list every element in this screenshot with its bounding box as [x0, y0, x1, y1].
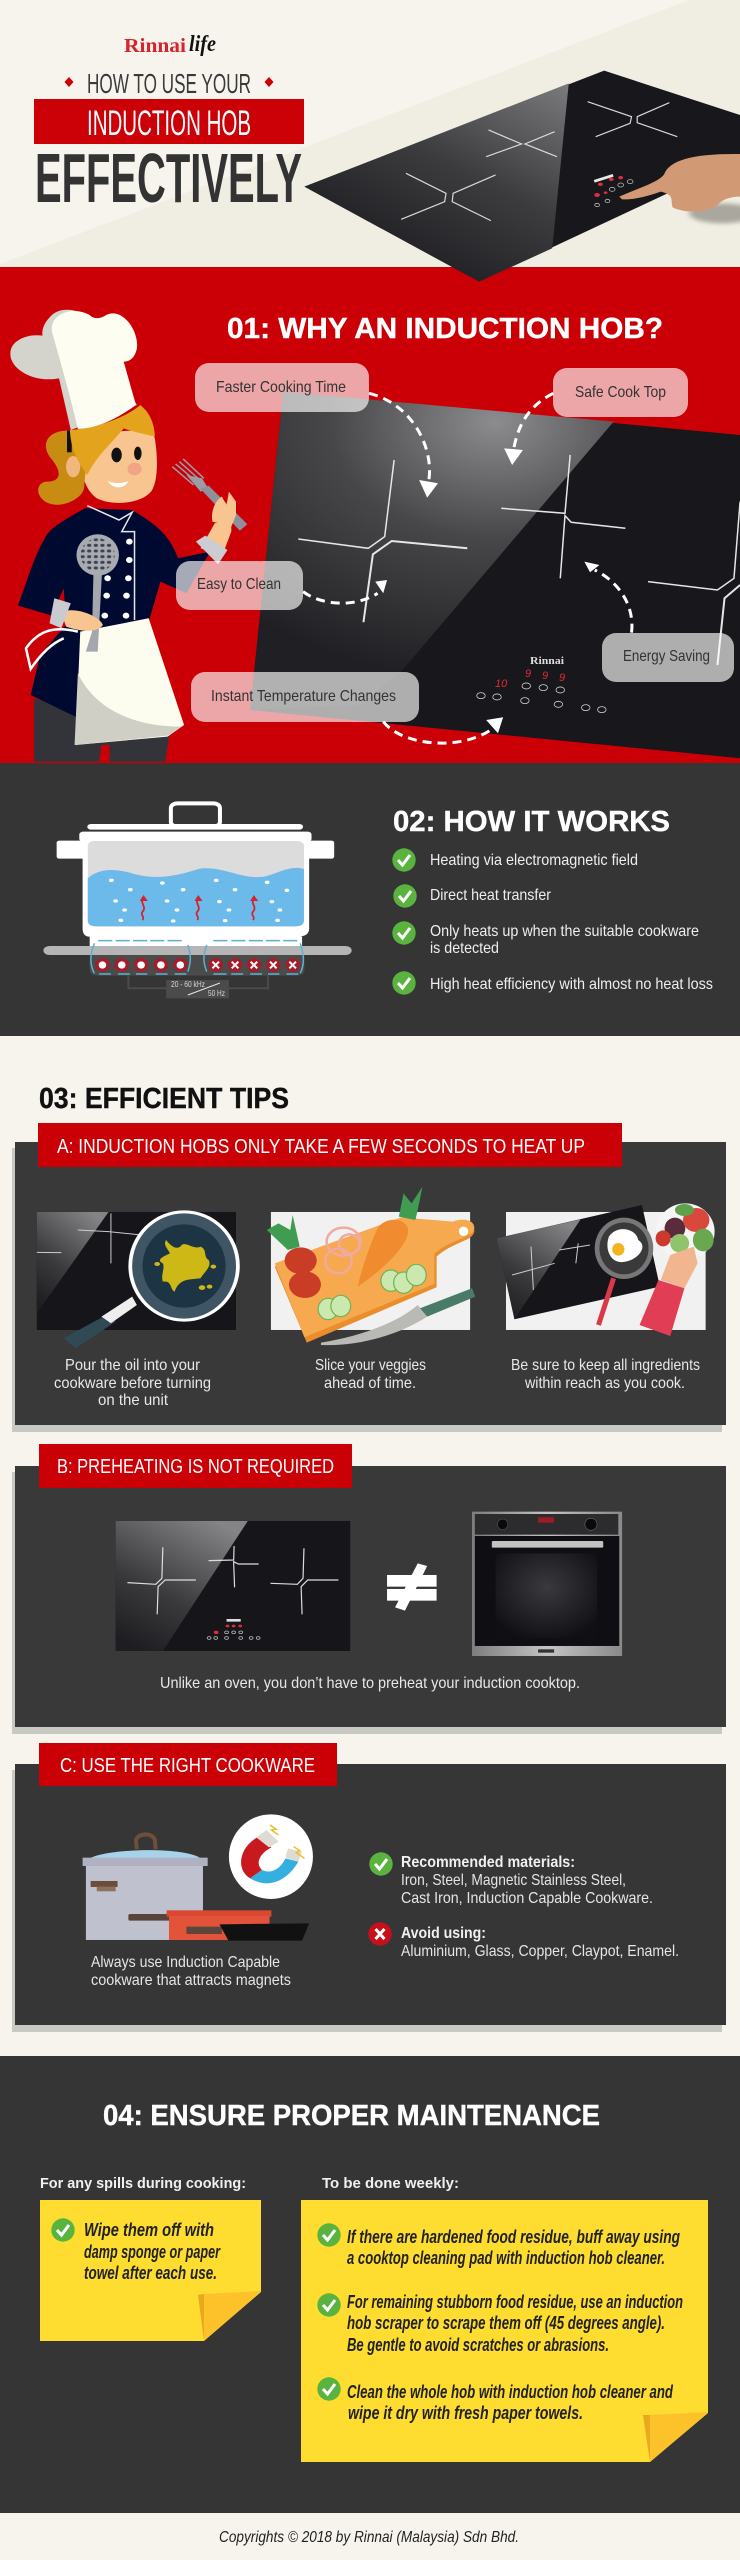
header diagonal tone [0, 0, 740, 267]
hob control labels [495, 655, 565, 690]
avoid using [368, 1922, 679, 1960]
frequency labels [171, 980, 225, 998]
hair band [67, 431, 72, 452]
label C: C: USE THE RIGHT COOKWARE [60, 1755, 315, 1777]
hob control labels: Rinnai [530, 655, 564, 667]
callout: easy to clean [176, 561, 303, 610]
sticky note: spills: damp sponge or paper [84, 2242, 221, 2262]
sticky note: weekly [301, 2200, 708, 2462]
title [34, 68, 304, 217]
label C [39, 1743, 337, 1786]
item 1 [392, 848, 638, 872]
recommended materials: Recommended materials: [401, 1854, 575, 1871]
logo: life [189, 31, 216, 56]
panel A: heat up [12, 1123, 726, 1432]
heading 02: 02: HOW IT WORKS [393, 806, 670, 838]
right hand fingers [212, 492, 236, 527]
chef hat [10, 310, 137, 430]
avoid using: Aluminium, Glass, Copper, Claypot, Enamel. [401, 1943, 679, 1960]
tip 3 [317, 2377, 674, 2423]
tip 3: wipe it dry with fresh paper towels. [348, 2403, 583, 2423]
caption 1: Pour the oil into your [65, 1357, 201, 1374]
section 02: how it works [0, 763, 740, 1036]
item 3: Only heats up when the suitable cookware [430, 923, 699, 940]
item 3: is detected [430, 940, 499, 957]
frequency labels: 20 - 60 kHz [171, 980, 205, 989]
arrows [303, 393, 632, 743]
chef character [10, 310, 247, 762]
label B: B: PREHEATING IS NOT REQUIRED [57, 1456, 334, 1478]
callout: instant temperature changes [191, 672, 419, 722]
apron [76, 618, 184, 745]
tip 2 [317, 2292, 683, 2355]
logo [124, 31, 216, 57]
sticky note: spills [40, 2200, 261, 2341]
tile: ingredients in reach [497, 1203, 715, 1336]
ponytail [38, 431, 87, 505]
item 2 [393, 884, 552, 908]
caption C: cookware that attracts magnets [91, 1972, 291, 1989]
induction hob [116, 1521, 350, 1651]
sticky note: spills: Wipe them off with [84, 2220, 214, 2240]
heading 01: 01: WHY AN INDUCTION HOB? [227, 313, 663, 345]
avoid using: Avoid using: [401, 1925, 486, 1942]
caption 3 [511, 1357, 700, 1392]
panel C: right cookware [12, 1743, 726, 2032]
caption C [91, 1954, 291, 1989]
label A: A: INDUCTION HOBS ONLY TAKE A FEW SECONDS TO HEAT UP [57, 1136, 585, 1158]
jacket [18, 508, 210, 719]
right arm [201, 522, 231, 557]
tile: oil in pan [37, 1210, 240, 1348]
left hand and cuff [61, 610, 103, 631]
caption 3: within reach as you cook. [524, 1375, 685, 1392]
copyright footer: Copyrights © 2018 by Rinnai (Malaysia) Sdn Bhd. [219, 2529, 519, 2546]
title: INDUCTION HOB [87, 104, 251, 143]
not equal sign [387, 1563, 437, 1611]
caption 1: on the unit [98, 1392, 169, 1409]
fork [172, 459, 247, 531]
caption 3: Be sure to keep all ingredients [511, 1357, 700, 1374]
callout: safe cook top: Safe Cook Top [575, 384, 666, 401]
apron ties [26, 629, 78, 669]
tile: sliced veggies [267, 1187, 475, 1345]
recommended materials [369, 1852, 653, 1907]
caption 2: Slice your veggies [315, 1357, 426, 1374]
buttons [101, 539, 133, 619]
large hob photo [250, 392, 740, 758]
eyes and smile [111, 448, 122, 462]
sticky note: spills: towel after each use. [84, 2263, 217, 2283]
tip 2: Be gentle to avoid scratches or abrasions. [347, 2335, 609, 2355]
callout: instant temperature changes: Instant Temperature Changes [211, 688, 396, 705]
recommended materials: Iron, Steel, Magnetic Stainless Steel, [401, 1872, 626, 1889]
caption 1: cookware before turning [54, 1375, 211, 1392]
panel B: preheating [12, 1444, 726, 1734]
recommended materials: Cast Iron, Induction Capable Cookware. [401, 1890, 653, 1907]
hair [70, 405, 155, 475]
hob control labels: 9 [559, 672, 565, 684]
tip 1 [317, 2223, 680, 2268]
caption C: Always use Induction Capable [91, 1954, 280, 1971]
red section background [0, 267, 740, 763]
item 4 [392, 971, 713, 995]
item 2: Direct heat transfer [430, 887, 552, 904]
pot diagram [43, 803, 352, 998]
item 4: High heat efficiency with almost no heat loss [430, 976, 713, 993]
callout: faster cooking time [195, 363, 369, 412]
callout: energy saving: Energy Saving [623, 648, 710, 665]
subheading weekly: To be done weekly: [322, 2175, 459, 2192]
caption B: Unlike an oven, you don’t have to preheat your induction cooktop. [160, 1675, 580, 1692]
cookware illustration [83, 1814, 313, 1941]
hob control labels: 10 [495, 678, 508, 690]
caption 2: ahead of time. [324, 1375, 416, 1392]
label A [38, 1123, 622, 1167]
header section [0, 0, 740, 267]
heading 03: 03: EFFICIENT TIPS [39, 1083, 289, 1115]
hob control labels: 9 [542, 670, 548, 682]
skimmer [76, 534, 119, 652]
legs [34, 698, 170, 762]
label B [39, 1444, 352, 1488]
logo: Rinnai [124, 35, 186, 57]
subheading spills: For any spills during cooking: [40, 2175, 246, 2192]
callout: safe cook top [553, 368, 688, 417]
section 04: maintenance [0, 2056, 740, 2513]
title: EFFECTIVELY [35, 139, 302, 217]
oven [472, 1512, 622, 1656]
hob control labels: 9 [525, 668, 531, 680]
magnet badge [229, 1814, 313, 1899]
callout: easy to clean: Easy to Clean [197, 576, 281, 593]
face [81, 431, 157, 503]
frequency labels: 50 Hz [208, 989, 225, 998]
item 1: Heating via electromagnetic field [430, 852, 638, 869]
item 3 [392, 921, 699, 957]
benefit list [392, 848, 713, 995]
heading 04: 04: ENSURE PROPER MAINTENANCE [103, 2100, 600, 2132]
caption 1 [54, 1357, 211, 1409]
header hob photo with hand [304, 71, 740, 282]
caption 2 [315, 1357, 426, 1392]
callout: faster cooking time: Faster Cooking Time [216, 379, 346, 396]
callout: energy saving [602, 633, 734, 682]
section 01: why an induction hob [10, 310, 740, 762]
title: HOW TO USE YOUR [87, 68, 251, 99]
collar and placket [87, 506, 135, 620]
